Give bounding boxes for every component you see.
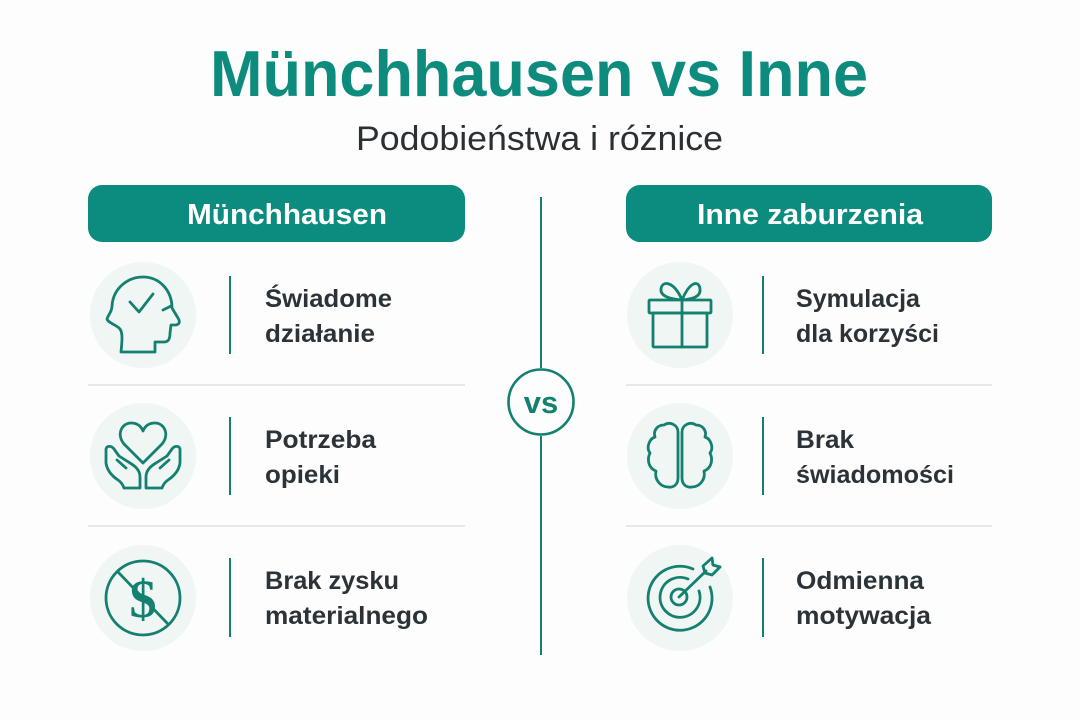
row: Świadome działanie	[90, 262, 392, 368]
icon: gift	[649, 284, 711, 347]
header: Münchhausen: Münchhausen	[187, 199, 387, 231]
label: Brak zysku	[265, 567, 399, 595]
central divider line	[540, 197, 542, 655]
label: materialnego	[265, 602, 428, 630]
divider tick	[229, 276, 231, 354]
label	[796, 426, 954, 489]
vs badge	[508, 370, 574, 434]
icon: head with check	[107, 277, 179, 352]
label	[796, 567, 932, 630]
row: Symulacja dla korzyści	[627, 262, 939, 368]
label	[265, 426, 377, 489]
label: dla korzyści	[796, 320, 939, 348]
label: Symulacja	[796, 285, 921, 313]
header: Inne zaburzenia	[626, 185, 992, 242]
vs badge: vs	[524, 385, 558, 420]
label: świadomości	[796, 461, 954, 489]
label: Potrzeba	[265, 426, 377, 454]
row: Odmienna motywacja	[627, 545, 932, 651]
label: działanie	[265, 320, 375, 348]
icon: target with arrow	[648, 558, 720, 630]
icon: brain	[648, 423, 712, 487]
icon: crossed-out dollar	[106, 561, 180, 635]
row: Brak zysku materialnego	[90, 545, 428, 651]
header: Münchhausen	[88, 185, 465, 242]
label: Odmienna	[796, 567, 925, 595]
icon: hands with heart	[106, 423, 180, 488]
divider tick	[229, 558, 231, 637]
row: Brak świadomości	[627, 403, 954, 509]
header: Inne zaburzenia: Inne zaburzenia	[697, 199, 924, 231]
divider tick	[762, 276, 764, 354]
title: Münchhausen vs Inne	[210, 37, 868, 110]
label: Brak	[796, 426, 854, 454]
label	[796, 285, 939, 348]
icon: crossed-out dollar: $	[130, 569, 156, 629]
panel: Münchhausen	[88, 185, 465, 651]
divider tick	[762, 417, 764, 495]
label: motywacja	[796, 602, 932, 630]
label	[265, 283, 392, 348]
label: opieki	[265, 461, 340, 489]
divider tick	[229, 417, 231, 495]
divider tick	[762, 558, 764, 637]
label: Świadome	[265, 283, 392, 313]
panel: Inne zaburzenia	[626, 185, 992, 651]
subtitle: Podobieństwa i różnice	[356, 120, 723, 158]
row: Potrzeba opieki	[90, 403, 377, 509]
label	[265, 567, 428, 630]
